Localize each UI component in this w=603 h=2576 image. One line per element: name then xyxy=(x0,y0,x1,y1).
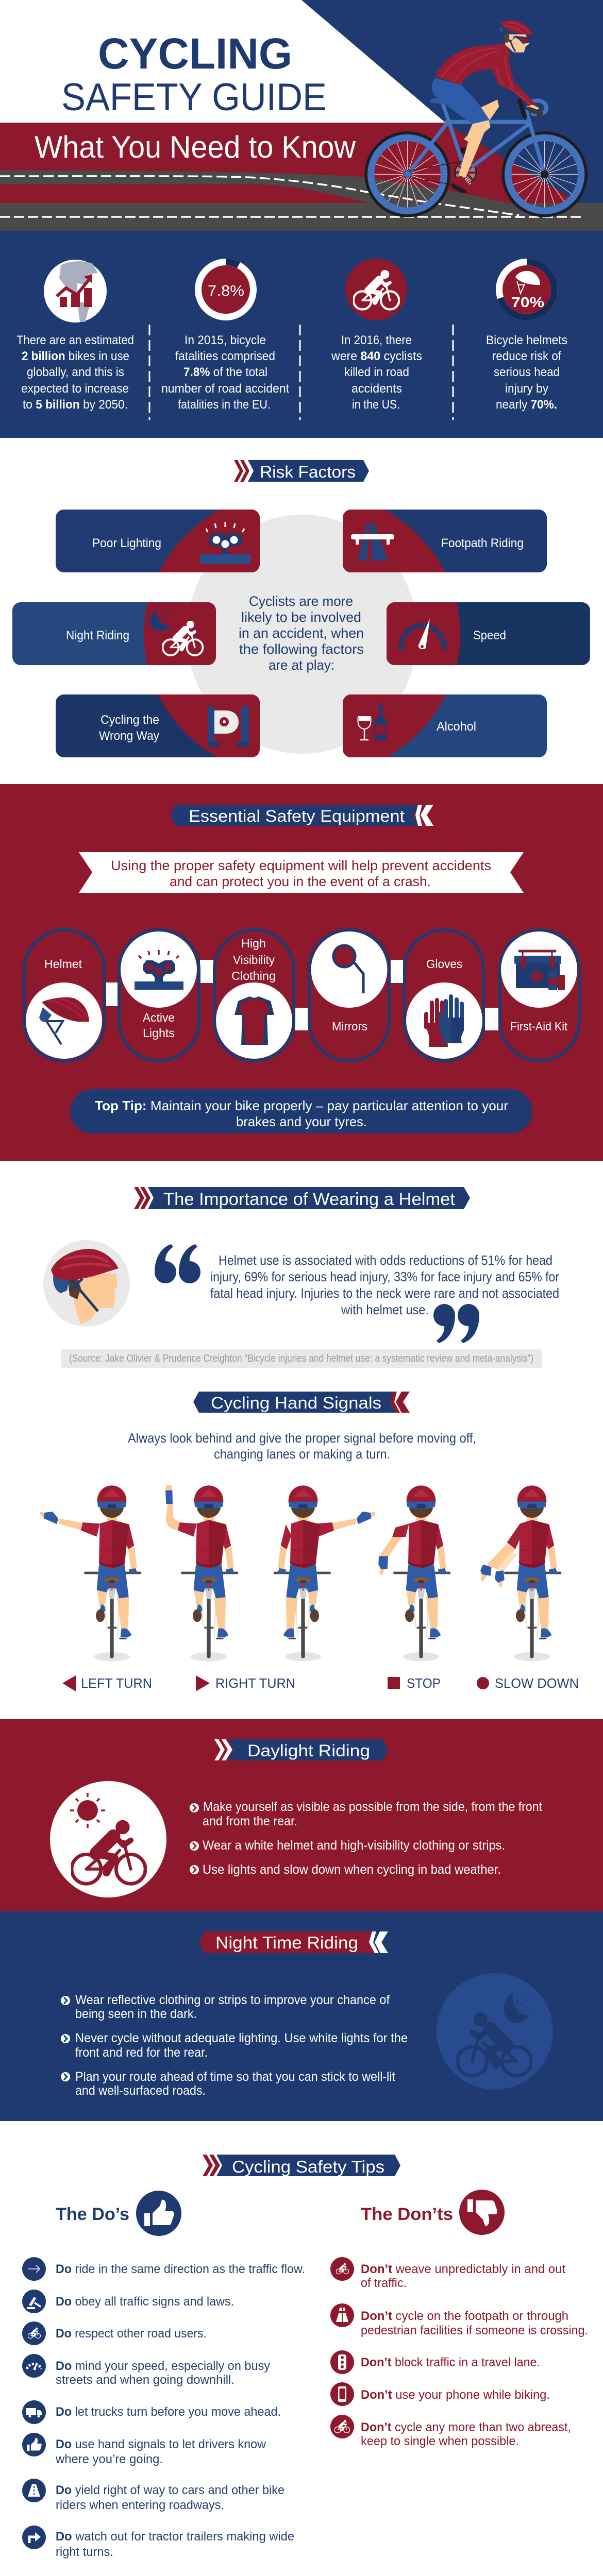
legend: STOP xyxy=(407,1675,441,1691)
panel: essential safety equipment xyxy=(0,784,603,1161)
card: footpath riding: Footpath Riding xyxy=(441,536,524,550)
do: mind speed xyxy=(22,2354,270,2387)
rider: right turn xyxy=(165,1485,237,1661)
icon: moon and cyclist xyxy=(437,1973,553,2090)
card: cycling the wrong way xyxy=(99,706,249,747)
do: mind speed: streets and when going downhill. xyxy=(56,2373,234,2387)
card: cycling the wrong way: Cycling the xyxy=(100,713,159,727)
quote text: Helmet use is associated with odds reductions of 51% for head xyxy=(219,1252,552,1268)
stat text: US cyclists killed: In 2016, there xyxy=(341,333,412,347)
quote text: with helmet use. xyxy=(341,1302,429,1317)
grey centre circle xyxy=(187,515,417,754)
quote text: injury, 69% for serious head injury, 33% for face injury and 65% for xyxy=(210,1269,559,1284)
central text: Cyclists are more xyxy=(249,594,353,609)
intro text: changing lanes or making a turn. xyxy=(214,1446,390,1462)
maroon band xyxy=(0,123,573,204)
quote text: fatal head injury. Injuries to the neck were rare and not associated xyxy=(210,1285,559,1301)
do: mind speed: Do mind your speed, especially on busy xyxy=(56,2359,270,2373)
stat text: EU fatalities: In 2015, bicycle xyxy=(185,333,266,347)
night tips: Wear reflective clothing or strips to improve your chance of xyxy=(75,1993,390,2007)
do: yield right of way: riders when entering roadways. xyxy=(56,2498,224,2512)
stat text: bikes in use: globally, and this is xyxy=(27,365,124,379)
do: use hand signals: Do use hand signals to let drivers know xyxy=(56,2437,266,2451)
do: ride with traffic: Do ride in the same direction as the traffic flow. xyxy=(56,2262,305,2276)
intro ribbon: Using the proper safety equipment will help prevent accidents xyxy=(111,858,491,873)
night tips: front and red for the rear. xyxy=(75,2045,208,2060)
heading: the do's xyxy=(56,2191,181,2236)
card: night riding xyxy=(66,610,203,655)
item: gloves: Gloves xyxy=(426,957,462,971)
heading: night time riding: Night Time Riding xyxy=(215,1933,358,1952)
central text: in an accident, when xyxy=(239,625,364,641)
stat text: US cyclists killed: were 840 cyclists xyxy=(331,349,422,363)
rider: slow down xyxy=(480,1485,560,1661)
heading: daylight riding xyxy=(214,1739,388,1760)
icon: 7.8 percent ring: 7.8% xyxy=(208,283,244,299)
stat text: EU fatalities xyxy=(161,333,289,412)
daylight tips: Make yourself as visible as possible from the side, from the front xyxy=(203,1800,542,1814)
title: CYCLING xyxy=(98,29,292,78)
navy diagonal background xyxy=(301,0,603,206)
do: tractor trailers xyxy=(22,2526,294,2559)
do: obey signs xyxy=(22,2290,234,2313)
title: SAFETY GUIDE xyxy=(61,75,327,118)
do: let trucks turn: Do let trucks turn before you move ahead. xyxy=(56,2405,281,2419)
daylight tips xyxy=(190,1800,542,1877)
heading: essential safety equipment xyxy=(170,805,433,826)
heading: risk factors: Risk Factors xyxy=(260,463,356,481)
legend xyxy=(62,1675,579,1691)
night tips: being seen in the dark. xyxy=(75,2007,197,2021)
card: cycling the wrong way: Wrong Way xyxy=(99,729,159,743)
stat text: bikes in use: to 5 billion by 2050. xyxy=(23,398,128,412)
stat text: helmets reduce risk: injury by xyxy=(505,382,548,396)
icon: moon and cyclist: z xyxy=(515,1997,520,2006)
do: tractor trailers: Do watch out for tractor trailers making wide xyxy=(56,2530,294,2544)
stat text: helmets reduce risk: serious head xyxy=(494,365,560,379)
card: night riding: z xyxy=(167,611,170,617)
icon: globe with rising chart xyxy=(44,260,107,323)
don't: weave in traffic: of traffic. xyxy=(361,2276,407,2290)
don't list xyxy=(330,2257,588,2448)
stat text: helmets reduce risk: nearly 70%. xyxy=(496,398,557,412)
stat text: US cyclists killed: accidents xyxy=(351,382,402,396)
legend: LEFT TURN xyxy=(81,1675,152,1691)
item: mirrors: Mirrors xyxy=(332,1020,367,1033)
card: night riding: Night Riding xyxy=(66,629,129,642)
don't: block traffic: Don’t block traffic in a travel lane. xyxy=(361,2355,540,2369)
hero panel xyxy=(0,0,603,231)
card: speed xyxy=(401,619,506,650)
heading: cycling hand signals xyxy=(193,1392,410,1413)
card: alcohol: Alcohol xyxy=(437,720,476,734)
intro ribbon: and can protect you in the event of a crash. xyxy=(170,874,431,889)
heading: the don'ts xyxy=(361,2190,505,2235)
card: night riding: z xyxy=(160,615,163,621)
item: high visibility clothing: High xyxy=(241,937,266,950)
icon: 70 percent helmet ring: 70% xyxy=(511,294,544,310)
panel: daylight riding xyxy=(0,1719,603,1911)
card: footpath riding xyxy=(351,523,524,561)
don't: weave in traffic xyxy=(330,2257,565,2290)
stat text: US cyclists killed xyxy=(331,333,422,412)
heading: night time riding xyxy=(199,1931,388,1953)
quote text xyxy=(210,1252,559,1317)
do: yield right of way xyxy=(22,2479,284,2512)
item: mirrors xyxy=(309,930,389,1061)
do: yield right of way: Do yield right of way to cars and other bike xyxy=(56,2483,284,2497)
panel: importance of wearing a helmet xyxy=(43,1187,559,1368)
night tips: Never cycle without adequate lighting. Use white lights for the xyxy=(75,2031,408,2045)
item: high visibility clothing xyxy=(214,930,294,1061)
risk cards xyxy=(12,510,590,757)
card: alcohol xyxy=(358,703,476,740)
do: use hand signals xyxy=(22,2433,266,2466)
stat text: bikes in use: There are an estimated xyxy=(16,333,134,347)
item: first-aid kit: First-Aid Kit xyxy=(510,1020,568,1033)
panel: night time riding xyxy=(0,1911,603,2121)
heading: cycling safety tips: Cycling Safety Tips xyxy=(232,2157,384,2176)
stat text: bikes in use: 2 billion bikes in use xyxy=(22,349,129,363)
don't: two abreast xyxy=(330,2415,571,2448)
intro text: Always look behind and give the proper signal before moving off, xyxy=(128,1430,476,1446)
heading: essential safety equipment: Essential Safety Equipment xyxy=(189,807,405,825)
stat text: bikes in use: expected to increase xyxy=(21,382,129,396)
subtitle: What You Need to Know xyxy=(35,130,356,164)
cyclist illustration xyxy=(366,21,586,215)
stat text: EU fatalities: number of road accident xyxy=(161,382,289,396)
item: first-aid kit xyxy=(500,930,579,1061)
icon: opening quote xyxy=(155,1244,200,1283)
panel: cycling safety tips xyxy=(22,2155,588,2559)
heading: daylight riding: Daylight Riding xyxy=(247,1741,370,1760)
item: gloves xyxy=(405,930,483,1061)
don't: phone: Don’t use your phone while biking. xyxy=(361,2388,550,2402)
legend: SLOW DOWN xyxy=(495,1675,579,1691)
icon: 70 percent helmet ring xyxy=(496,259,558,320)
night tips xyxy=(61,1993,408,2098)
divider xyxy=(149,325,453,420)
top tip pill: Top Tip: Maintain your bike properly – pay particular attention to your xyxy=(95,1098,508,1113)
item: active lights: Lights xyxy=(143,1026,175,1040)
don't: weave in traffic: Don’t weave unpredictably in and out xyxy=(361,2262,565,2276)
night tips: Plan your route ahead of time so that you can stick to well-lit xyxy=(75,2070,395,2084)
stat text: helmets reduce risk xyxy=(486,333,567,412)
card: night riding: z xyxy=(164,613,167,619)
heading: the do's: The Do’s xyxy=(56,2205,129,2224)
rider: right turn arm out xyxy=(275,1485,375,1661)
daylight tips: Use lights and slow down when cycling in bad weather. xyxy=(203,1862,501,1877)
panel: risk factors xyxy=(12,460,590,780)
don't: footpath: pedestrian facilities if someone is crossing. xyxy=(361,2324,588,2337)
road xyxy=(0,170,603,231)
item: active lights: Active xyxy=(143,1011,175,1024)
top tip pill: brakes and your tyres. xyxy=(236,1114,367,1129)
item: active lights xyxy=(119,930,199,1061)
central text: the following factors xyxy=(239,641,364,657)
stat text: bikes in use xyxy=(16,333,134,412)
do: ride with traffic xyxy=(22,2257,305,2281)
icon: head with helmet xyxy=(43,1240,130,1327)
daylight tips: Wear a white helmet and high-visibility clothing or strips. xyxy=(203,1838,505,1853)
central text: are at play: xyxy=(269,657,334,673)
icon: 7.8 percent ring xyxy=(195,259,257,320)
night tips: and well-surfaced roads. xyxy=(75,2083,206,2098)
heading: cycling safety tips xyxy=(203,2155,400,2176)
do: use hand signals: where you’re going. xyxy=(55,2452,163,2466)
icon: moon and cyclist: z xyxy=(526,1995,530,2004)
icon: sun and cyclist xyxy=(50,1781,166,1897)
do: respect road users xyxy=(22,2321,207,2345)
don't: block traffic xyxy=(330,2350,540,2374)
don't: footpath: Don’t cycle on the footpath or through xyxy=(361,2309,568,2323)
daylight tips: and from the rear. xyxy=(203,1814,297,1828)
don't: two abreast: Don’t cycle any more than two abreast, xyxy=(361,2420,571,2434)
do: obey signs: Do obey all traffic signs and laws. xyxy=(56,2295,234,2309)
card: poor lighting: Poor Lighting xyxy=(92,536,161,550)
panel: cycling hand signals xyxy=(40,1392,579,1691)
rider: stop xyxy=(378,1485,449,1661)
heading: cycling hand signals: Cycling Hand Signals xyxy=(211,1394,381,1412)
icon: moon and cyclist: z xyxy=(521,2001,524,2008)
item: high visibility clothing: Visibility xyxy=(233,953,275,967)
stat text: EU fatalities: 7.8% of the total xyxy=(183,365,267,379)
do: tractor trailers: right turns. xyxy=(56,2545,113,2559)
stat text: EU fatalities: fatalities comprised xyxy=(175,349,275,363)
stat text: helmets reduce risk: Bicycle helmets xyxy=(486,333,567,347)
intro ribbon xyxy=(79,852,524,893)
stat text: US cyclists killed: killed in road xyxy=(344,365,409,379)
card: speed: Speed xyxy=(473,629,506,642)
stat text: US cyclists killed: in the US. xyxy=(352,398,400,412)
item: helmet xyxy=(24,930,105,1061)
central text: likely to be involved xyxy=(241,609,361,625)
icon: closing quote xyxy=(433,1304,479,1343)
rider: left turn xyxy=(40,1485,140,1661)
stat text: EU fatalities: fatalities in the EU. xyxy=(178,398,271,412)
central text xyxy=(239,594,364,673)
top tip pill xyxy=(70,1089,532,1133)
do: respect road users: Do respect other road users. xyxy=(56,2327,207,2341)
icon: cyclist in circle xyxy=(345,259,407,320)
source note xyxy=(61,1349,542,1368)
heading: importance of wearing a helmet: The Importance of Wearing a Helmet xyxy=(163,1190,456,1209)
don't: two abreast: keep to single when possible. xyxy=(361,2434,519,2448)
heading: risk factors xyxy=(234,460,369,482)
intro text xyxy=(128,1430,476,1462)
do list xyxy=(22,2257,305,2559)
don't: footpath xyxy=(330,2303,588,2337)
legend: RIGHT TURN xyxy=(215,1675,295,1691)
title xyxy=(61,29,327,118)
do: let trucks turn xyxy=(22,2400,281,2424)
card: poor lighting xyxy=(92,522,250,564)
connectors xyxy=(105,960,498,1030)
item: helmet: Helmet xyxy=(44,957,82,971)
item: high visibility clothing: Clothing xyxy=(231,969,276,982)
don't: phone xyxy=(330,2382,550,2406)
stat text: helmets reduce risk: reduce risk of xyxy=(492,349,561,363)
source note: (Source: Jake Olivier & Prudence Creighton “Bicycle injuries and helmet use: a systematic review and meta-analysis”) xyxy=(69,1353,533,1364)
heading: the don'ts: The Don’ts xyxy=(361,2205,453,2224)
panel: statistics xyxy=(0,231,603,438)
